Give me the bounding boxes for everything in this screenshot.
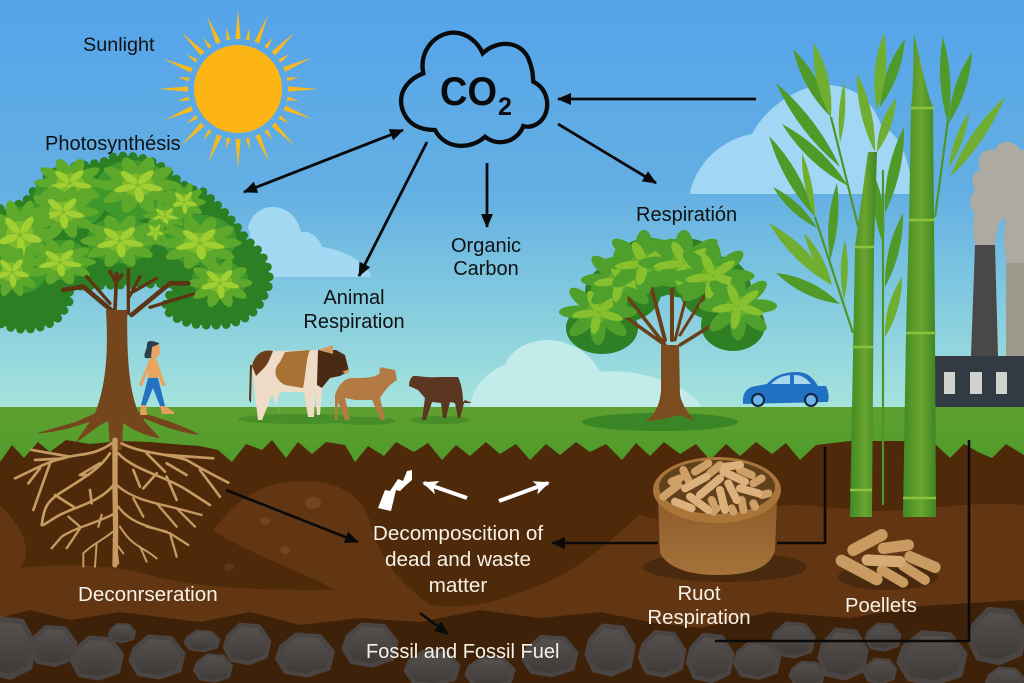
big cow [249, 345, 349, 420]
label: Sunlight: Sunlight [83, 34, 155, 56]
label: Decomposition: dead and waste [385, 548, 531, 571]
background clouds [240, 85, 914, 408]
ground grass [0, 407, 1024, 462]
decomposer icon [378, 470, 412, 511]
label: Animal Respiration: Animal [323, 287, 385, 309]
label: Fossil Fuel: Fossil and Fossil Fuel [366, 641, 559, 663]
label: Decomposition: matter [429, 574, 487, 597]
label: Ruot Respiration: Respiration [647, 607, 751, 629]
left stalk [850, 152, 877, 517]
label: Organic Carbon: Organic [451, 235, 521, 257]
soil [0, 440, 1024, 683]
label: Poellets: Poellets [845, 595, 917, 617]
trunk and branches [37, 270, 200, 450]
middle tree [559, 230, 777, 431]
person walking [139, 341, 174, 415]
cows [249, 345, 472, 420]
bamboo leaves [769, 37, 972, 304]
calf [335, 367, 397, 420]
sun [158, 9, 318, 169]
canopy highlights [0, 156, 252, 308]
white arrows [424, 483, 548, 501]
label: Deconrseration: Deconrseration [78, 583, 218, 606]
arrows around CO2 [244, 99, 756, 276]
sky background [0, 0, 1024, 410]
cow ground shadows [238, 414, 470, 425]
thin stem [815, 117, 948, 505]
factory with smoke [934, 142, 1024, 407]
canopy [0, 156, 269, 329]
pellets pile [838, 535, 938, 590]
label: Decomposition: Decomposcition of [373, 522, 543, 545]
dark cow [409, 376, 472, 420]
soil lighter layers [0, 481, 1024, 640]
arrows in soil [226, 440, 969, 641]
label: Ruot Respiration: Ruot [677, 583, 721, 605]
CO2 cloud: CO [440, 70, 497, 114]
label: Animal Respiration: Respiration [303, 311, 405, 333]
label: Respiration: Respiratión [636, 204, 737, 226]
label: Organic Carbon: Carbon [453, 258, 519, 280]
rocks [0, 610, 1024, 683]
right stalk [903, 33, 936, 517]
pellet basket [643, 457, 807, 582]
label: Photosynthesis: Photosynthésis [45, 133, 181, 155]
car [743, 372, 829, 406]
bamboo [769, 33, 1005, 517]
tree roots [15, 440, 228, 567]
rock layer backing [0, 600, 1024, 683]
CO2 cloud [401, 33, 547, 146]
CO2 cloud: 2 [498, 93, 512, 121]
left large tree [0, 156, 269, 450]
